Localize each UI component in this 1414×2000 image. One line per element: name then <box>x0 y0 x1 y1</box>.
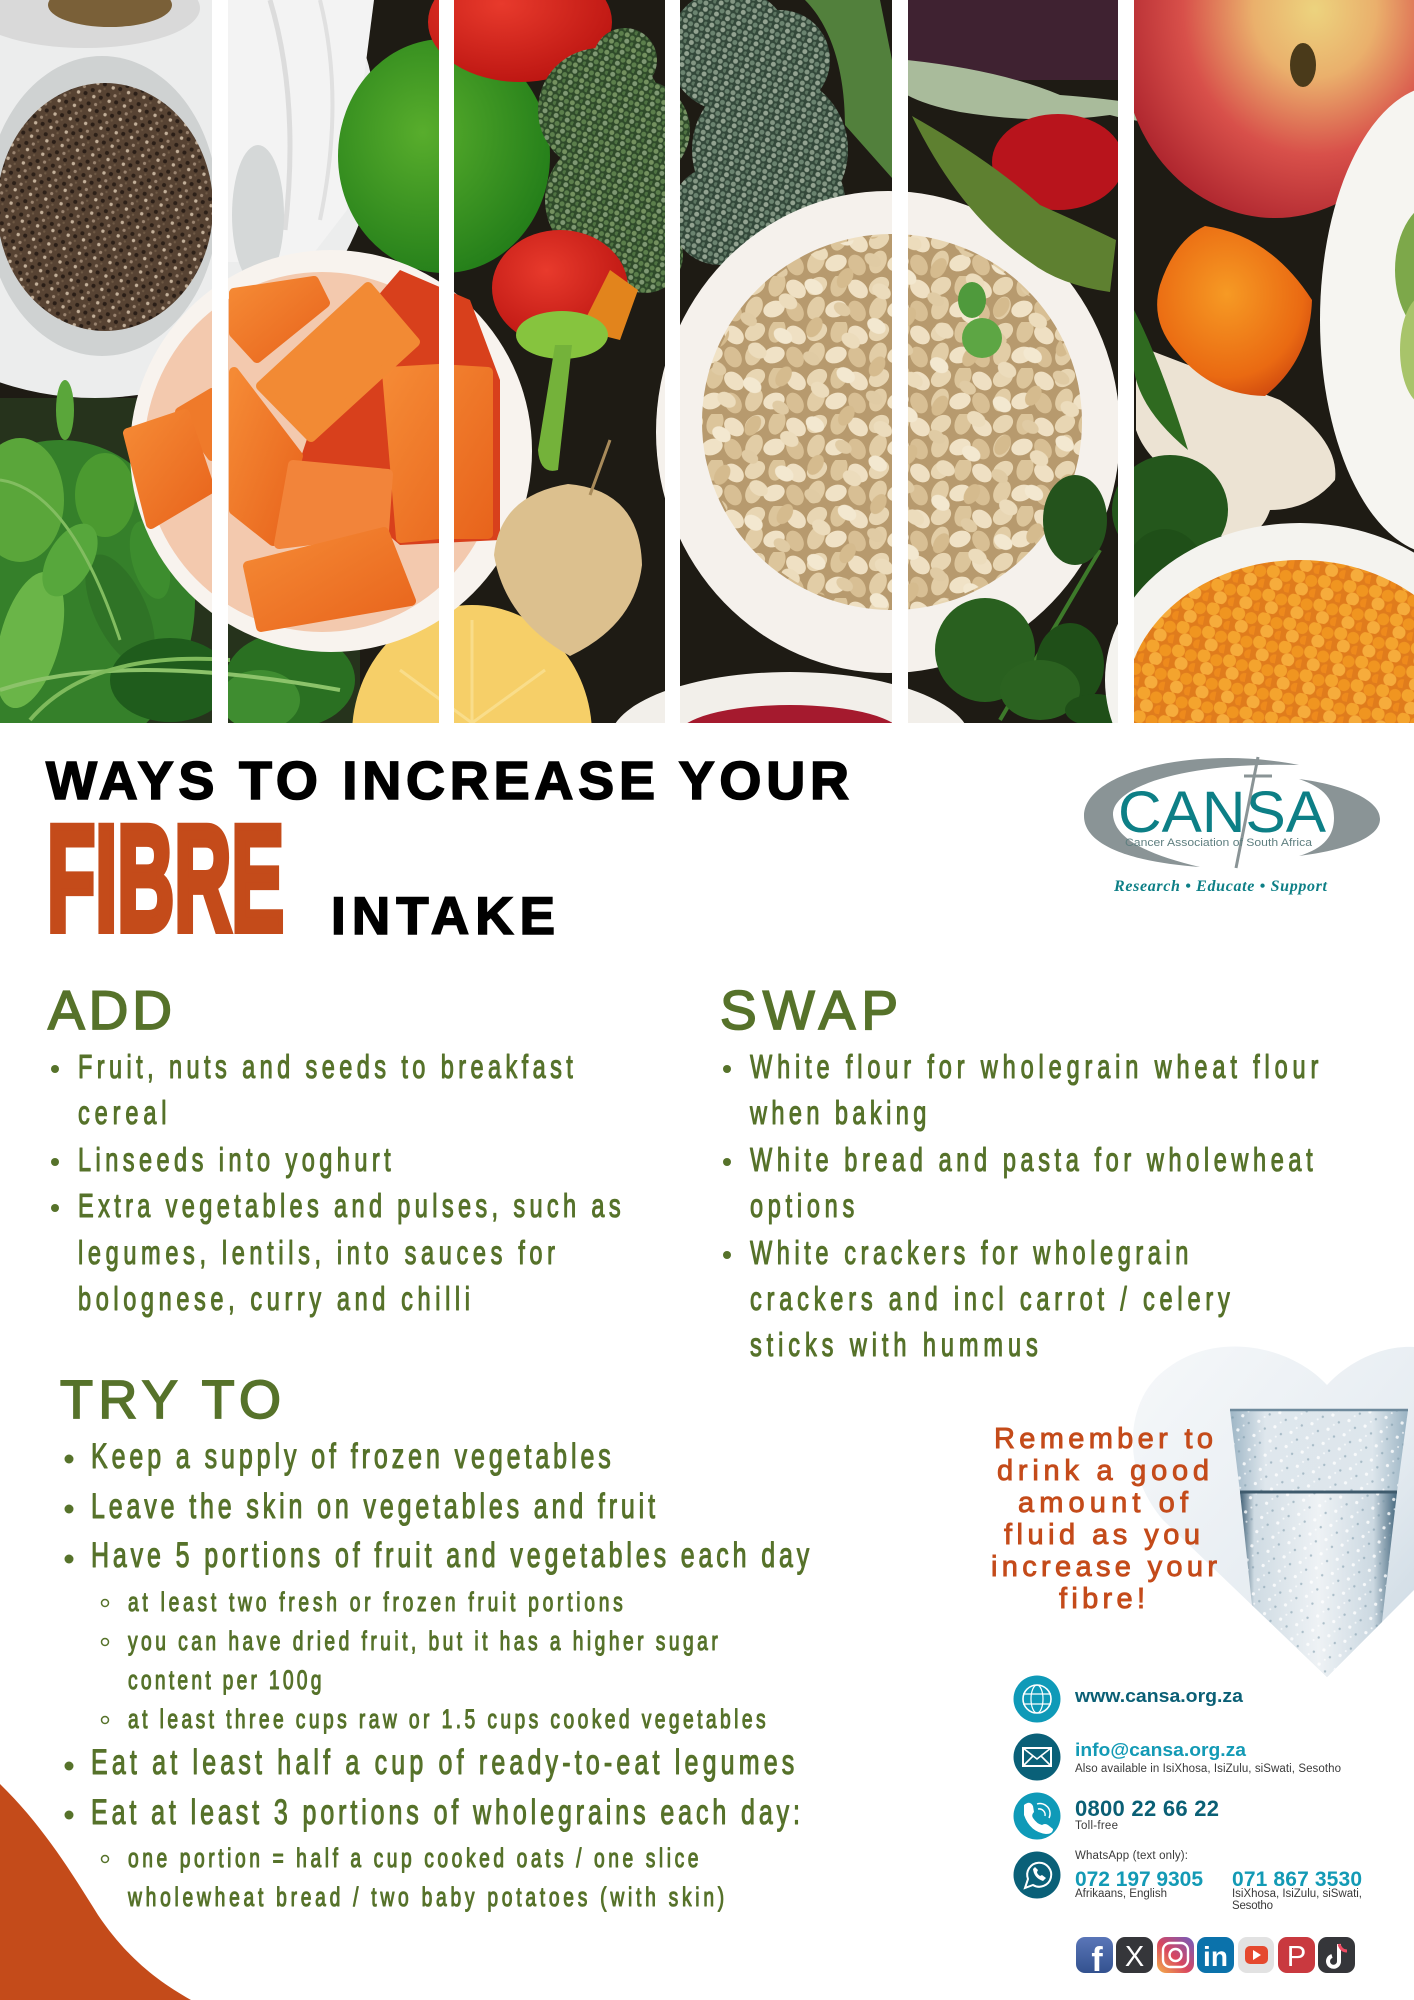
swap list: White bread and pasta for wholewheat <box>750 1142 1313 1179</box>
callout: remember to drink: fluid as you <box>1004 1519 1200 1551</box>
try to heading: TRY TO <box>60 1370 281 1430</box>
panel: heart with glass of water <box>1133 1346 1414 1700</box>
swap list: White flour for wholegrain wheat flour <box>750 1049 1319 1086</box>
white vertical strip dividers <box>212 0 1134 723</box>
add list: bolognese, curry and chilli <box>78 1281 470 1318</box>
icon: globe <box>1014 1676 1060 1722</box>
food: parsley dark leaves <box>1112 455 1228 598</box>
add list <box>78 1049 621 1318</box>
icon: x: X <box>1125 1941 1144 1973</box>
icon: linkedin: in <box>1203 1941 1228 1972</box>
food: physalis <box>494 440 642 656</box>
logo: CANSA <box>1084 757 1380 895</box>
food: orange pepper <box>1157 226 1312 396</box>
icon: whatsapp <box>1014 1852 1060 1898</box>
try to main list: Keep a supply of frozen vegetables <box>91 1437 611 1476</box>
try to main list: Eat at least 3 portions of wholegrains each day: <box>91 1793 800 1832</box>
swap list: when baking <box>749 1095 926 1132</box>
photo banner: fibre-rich foods in vertical strips <box>0 0 1414 723</box>
heading: fibre: FIBRE <box>47 794 284 962</box>
food: purple leaves and silver leaf <box>908 0 1138 121</box>
try to sub list: at least three cups raw or 1.5 cups cooked vegetables <box>128 1704 766 1734</box>
icon: linkedin <box>1197 1937 1234 1973</box>
add list: Linseeds into yoghurt <box>78 1142 391 1179</box>
whatsapp number 2: 071 867 3530 <box>1232 1868 1362 1891</box>
add list: Extra vegetables and pulses, such as <box>78 1188 621 1225</box>
heading: intake: INTAKE <box>331 887 555 946</box>
food: lemon half <box>352 605 592 723</box>
food: carrot bowl <box>128 250 532 652</box>
icon: envelope <box>1014 1734 1060 1780</box>
callout: remember to drink <box>991 1423 1217 1615</box>
food: green herbs bottom left <box>0 380 360 760</box>
website: www.cansa.org.za <box>1074 1686 1244 1706</box>
email note: Also available in IsiXhosa, IsiZulu, siSwati, Sesotho <box>1075 1763 1341 1775</box>
panel: swap <box>720 979 1319 1364</box>
food: parsley near barley bowl <box>935 475 1125 726</box>
callout: remember to drink: drink a good <box>997 1455 1209 1487</box>
toll-free label: Toll-free <box>1075 1820 1118 1832</box>
social media icons <box>1076 1937 1355 1979</box>
try to sub list <box>127 1587 766 1912</box>
icon: facebook <box>1076 1937 1113 1979</box>
try to sub list: you can have dried fruit, but it has a higher sugar <box>128 1626 718 1656</box>
panel: add <box>48 979 621 1318</box>
logo wordmark: CANSA <box>1118 780 1326 845</box>
swap heading: SWAP <box>720 979 898 1041</box>
food: green leaf by pepper <box>1134 310 1188 450</box>
food: red tomato top <box>428 0 612 82</box>
icon: x <box>1116 1937 1153 1973</box>
icon: facebook: f <box>1091 1941 1103 1979</box>
heart shape <box>1133 1346 1414 1677</box>
food: garlic bulb <box>1136 345 1335 542</box>
logo subtitle: Cancer Association of South Africa <box>1125 837 1313 849</box>
whatsapp number 2 languages: Sesotho <box>1232 1900 1273 1912</box>
icon: youtube <box>1238 1937 1274 1973</box>
icon: phone <box>1014 1792 1060 1840</box>
try to main list: Have 5 portions of fruit and vegetables each day <box>91 1536 810 1575</box>
try to main list <box>91 1437 810 1832</box>
logo right crescent <box>1299 779 1380 856</box>
panel: contact details <box>1014 1676 1362 1912</box>
panel: try to <box>60 1370 810 1912</box>
heading: ways to increase your: WAYS TO INCREASE YOUR <box>46 751 849 811</box>
whatsapp number 2 languages: IsiXhosa, IsiZulu, siSwati, <box>1232 1888 1362 1900</box>
icon: tiktok <box>1318 1937 1355 1973</box>
icon: pinterest: P <box>1287 1941 1306 1973</box>
add bullets <box>51 1065 59 1212</box>
swap list <box>749 1049 1319 1364</box>
food: apple <box>1123 0 1414 218</box>
food: green serrated leaf <box>912 116 1116 292</box>
callout: remember to drink: Remember to <box>994 1423 1213 1455</box>
swap list: options <box>750 1188 854 1225</box>
try to sub-bullets <box>102 1600 108 1862</box>
icon: pinterest <box>1278 1937 1315 1973</box>
try to sub list: content per 100g <box>128 1665 321 1695</box>
callout: remember to drink: fibre! <box>1059 1583 1145 1615</box>
icon: glass of water <box>1230 1410 1408 1700</box>
try to sub list: at least two fresh or frozen fruit portions <box>128 1587 623 1617</box>
try to main list: Leave the skin on vegetables and fruit <box>91 1487 656 1526</box>
swap bullets <box>723 1065 731 1259</box>
toll-free number: 0800 22 66 22 <box>1075 1796 1219 1821</box>
whatsapp label: WhatsApp (text only): <box>1075 1850 1188 1862</box>
food: white plate with chia bowl <box>0 0 377 398</box>
callout: remember to drink: increase your <box>991 1551 1217 1583</box>
swap list: White crackers for wholegrain <box>750 1235 1188 1272</box>
add list: Fruit, nuts and seeds to breakfast <box>78 1049 573 1086</box>
whatsapp number 1 languages: Afrikaans, English <box>1075 1888 1167 1900</box>
try to sub list: one portion = half a cup cooked oats / one slice <box>128 1843 698 1873</box>
food: lime <box>338 39 550 273</box>
add heading: ADD <box>48 979 172 1041</box>
logo tagline: Research • Educate • Support <box>1113 878 1328 895</box>
food: broccoli <box>538 0 848 293</box>
food: lentil bowl <box>1105 523 1414 723</box>
food: sprout on barley <box>958 282 1002 358</box>
logo cross <box>1236 757 1272 868</box>
decorative orange corner shape <box>0 1784 191 2000</box>
add list: cereal <box>78 1095 167 1132</box>
logo left crescent <box>1084 758 1299 867</box>
email: info@cansa.org.za <box>1075 1740 1247 1760</box>
food: bowl with red fruit at bottom <box>616 672 964 723</box>
whatsapp number 1: 072 197 9305 <box>1075 1868 1203 1891</box>
swap list: crackers and incl carrot / celery <box>750 1281 1230 1318</box>
icon: instagram <box>1157 1937 1194 1973</box>
callout: remember to drink: amount of <box>1018 1487 1189 1519</box>
food: barley bowl <box>656 191 1120 673</box>
food: white bowl right edge <box>1320 85 1414 555</box>
try to bullets <box>64 1454 74 1820</box>
food: small red pepper with stem <box>492 230 638 471</box>
food: deep red tomato <box>992 114 1124 210</box>
add list: legumes, lentils, into sauces for <box>78 1235 555 1272</box>
try to sub list: wholewheat bread / two baby potatoes (with skin) <box>127 1882 724 1912</box>
try to main list: Eat at least half a cup of ready-to-eat legumes <box>91 1743 794 1782</box>
food: green leaf behind broccoli <box>805 0 892 178</box>
swap list: sticks with hummus <box>750 1327 1038 1364</box>
whatsapp number 2 languages <box>1232 1888 1362 1912</box>
